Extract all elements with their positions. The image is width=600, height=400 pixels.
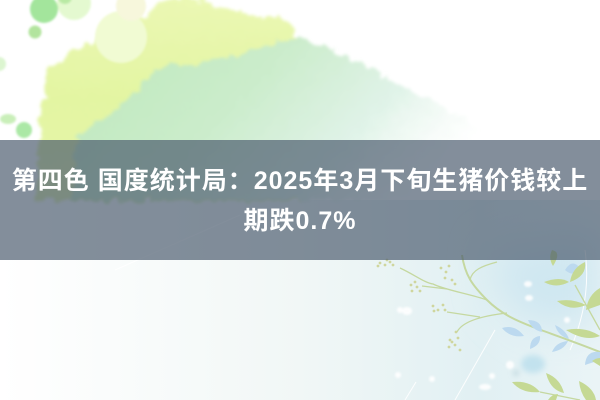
thin white streaks (115, 215, 587, 400)
white bokeh dots (395, 281, 570, 390)
pale bokeh circles (0, 0, 147, 138)
plant: green leaves (512, 250, 600, 400)
plant: blue leaves (502, 263, 600, 365)
plant: seed sprays (377, 259, 461, 351)
title: 第四色 国度统计局：2025年3月下旬生猪价钱较上期跌0.7% (12, 167, 588, 235)
soft blue blotch and dot (514, 355, 545, 375)
title band (0, 140, 600, 260)
yellow-green watercolor splash (36, 0, 300, 200)
pale blue wash bottom right (490, 230, 600, 330)
lower pale wash (0, 200, 600, 400)
plant: branch stems (400, 255, 600, 400)
mint-green watercolor wash (70, 36, 520, 200)
